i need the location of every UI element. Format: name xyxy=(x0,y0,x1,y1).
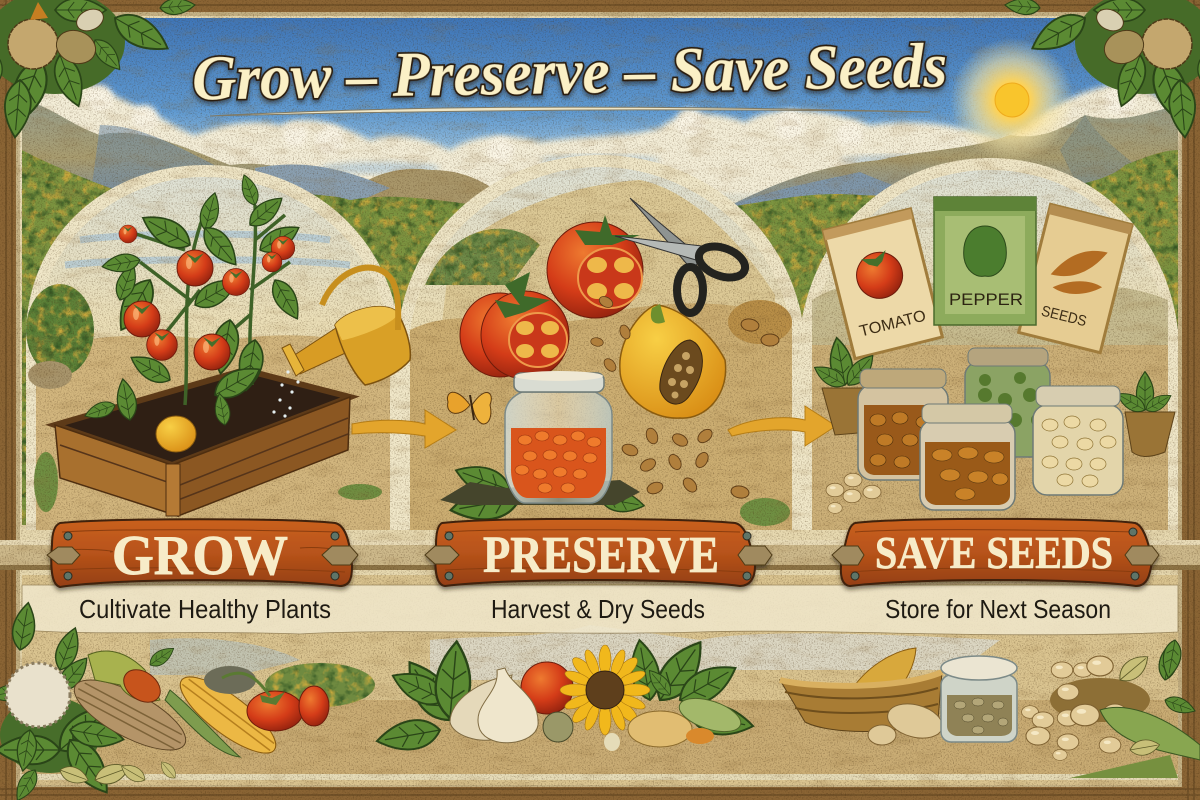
illustration: tomato plant in raised bed xyxy=(55,172,350,516)
lower parchment band xyxy=(22,575,1178,785)
distant bush xyxy=(425,229,540,285)
seed packet: tomato: TOMATO xyxy=(858,308,928,341)
yellow corn xyxy=(170,665,286,765)
banner: grow: GROW xyxy=(112,525,288,587)
mountains xyxy=(22,100,1178,215)
corner foliage: top left xyxy=(0,0,196,138)
bottom centre vegetables xyxy=(374,633,756,755)
seed packet: seeds xyxy=(1019,204,1132,353)
arch sky stripes xyxy=(65,234,350,265)
bottom left vegetables xyxy=(0,601,375,800)
leaves xyxy=(137,207,196,255)
open pepper xyxy=(88,643,177,709)
greenery behind the arches xyxy=(22,150,1178,525)
title: Grow – Preserve – Save Seeds xyxy=(192,29,948,114)
jar: green seeds xyxy=(965,348,1050,457)
loose beans xyxy=(826,473,881,513)
leaves xyxy=(374,633,756,755)
small gourd and bean xyxy=(543,712,573,742)
arch ground xyxy=(410,303,792,530)
yellow fruit xyxy=(156,416,196,452)
illustration: seed jar with dark leaves xyxy=(440,371,646,526)
banner: preserve: PRESERVE xyxy=(483,527,719,584)
icon: scissors xyxy=(615,198,749,313)
background shrub xyxy=(265,663,375,707)
arrow: grow to preserve xyxy=(352,410,456,448)
glass jar xyxy=(941,675,1017,742)
clouds xyxy=(22,78,1178,195)
sky xyxy=(22,18,1178,203)
corn in basket xyxy=(855,648,916,690)
small tomato xyxy=(222,673,303,731)
small pepper xyxy=(299,686,329,726)
caption: preserve: Harvest & Dry Seeds xyxy=(491,594,705,624)
almond beans xyxy=(884,698,946,744)
stems xyxy=(130,205,290,405)
jar: pale beans xyxy=(1033,386,1123,495)
raised bed xyxy=(55,370,350,516)
banner: grow xyxy=(47,519,358,587)
bean pile xyxy=(1022,656,1178,778)
illustration: yellow pepper xyxy=(620,304,726,418)
icon: butterfly xyxy=(447,392,491,424)
seed packet: seeds: SEEDS xyxy=(1040,303,1088,330)
arch ground xyxy=(36,335,390,530)
panel: save seeds arch xyxy=(800,158,1178,530)
jar: brown beans xyxy=(858,369,948,480)
corner foliage: top right xyxy=(1004,0,1200,138)
basket xyxy=(780,672,942,732)
garlic xyxy=(450,675,512,740)
potted plants xyxy=(811,336,1175,456)
title underline xyxy=(210,107,930,116)
tomatoes xyxy=(177,250,213,286)
icon: watering can xyxy=(272,268,410,418)
jar: amber seeds xyxy=(920,404,1015,510)
arrow: preserve to save seeds xyxy=(728,406,836,446)
banner: preserve xyxy=(425,519,772,586)
seed packet: pepper: PEPPER xyxy=(949,290,1023,309)
panel: grow arch xyxy=(26,165,400,530)
wooden beam xyxy=(0,540,1200,570)
green husk xyxy=(165,690,240,757)
caption: save seeds: Store for Next Season xyxy=(885,594,1111,624)
leaves and pod xyxy=(1100,639,1200,760)
banner: save seeds xyxy=(832,519,1159,586)
left bushes xyxy=(26,284,382,512)
caption: grow: Cultivate Healthy Plants xyxy=(79,594,331,624)
seed packet: pepper xyxy=(934,197,1036,325)
seeds scattered xyxy=(590,294,779,499)
tomato xyxy=(521,662,573,714)
caption ribbon xyxy=(22,585,1178,635)
pale corn xyxy=(65,666,195,764)
sunflower xyxy=(560,645,650,735)
leaves xyxy=(0,601,179,800)
sun xyxy=(950,38,1074,162)
banner: save seeds: SAVE SEEDS xyxy=(875,527,1113,578)
bottom right basket and jar xyxy=(780,639,1200,778)
seed packet: tomato xyxy=(823,209,942,359)
cauliflower xyxy=(6,663,70,727)
illustration: cut tomatoes xyxy=(460,215,643,379)
squash xyxy=(204,666,256,694)
panel: preserve arch xyxy=(398,155,804,530)
